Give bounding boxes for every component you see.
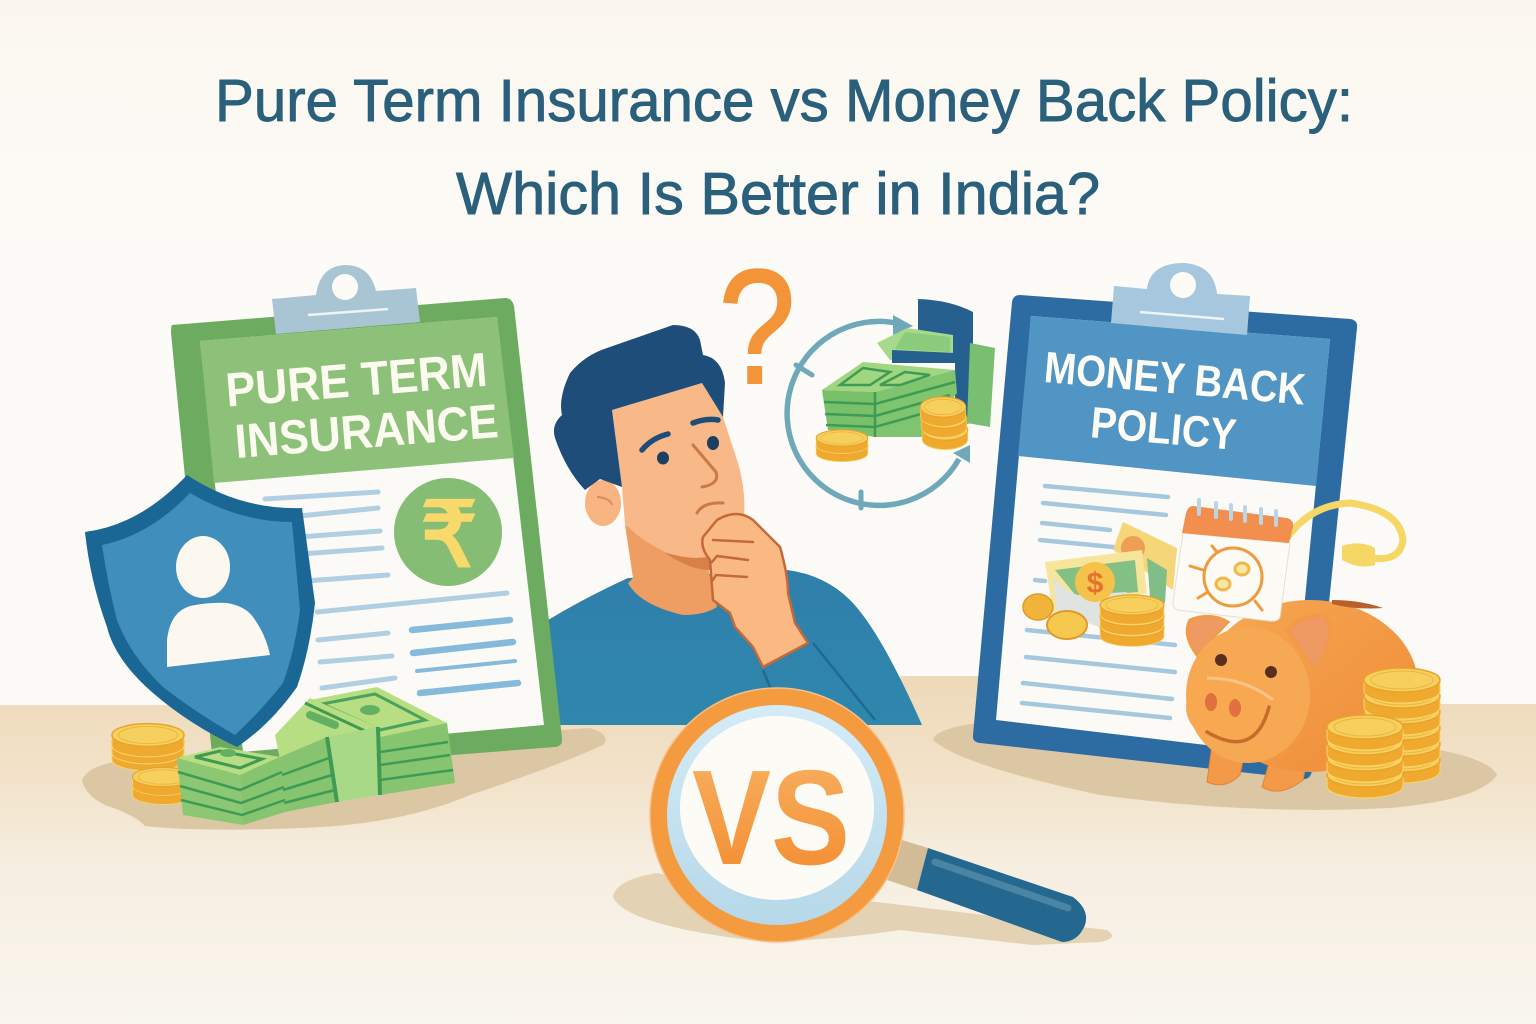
lens: [667, 705, 887, 925]
face: [612, 383, 744, 558]
icon: piggy bank: [1186, 600, 1418, 791]
front stack: [177, 747, 280, 775]
paper sheet: [996, 316, 1330, 755]
sleeve lines: [763, 643, 875, 720]
icon: calendar: [1173, 500, 1293, 621]
shirt: [540, 570, 922, 725]
coins: [922, 420, 968, 450]
person thinking: [540, 325, 922, 725]
document lines: [265, 492, 507, 688]
middle stack: [275, 698, 377, 760]
green header band: [200, 317, 514, 483]
neck: [625, 525, 717, 615]
clip: [272, 265, 420, 334]
fingers: [712, 540, 753, 580]
icon: shield with person: [85, 475, 315, 747]
snout: [1186, 672, 1268, 742]
paper band: [327, 727, 380, 802]
VS label: VS: [692, 742, 850, 893]
icon: cash stacks left: [177, 687, 455, 825]
ground shadows: [82, 722, 1497, 945]
ear: [585, 480, 621, 526]
icon: coins on policy: [1023, 594, 1164, 646]
ear left: [1187, 616, 1228, 655]
back stack: [310, 687, 447, 737]
ferrule: [887, 840, 928, 890]
header text: INSURANCE: [233, 395, 500, 469]
person body: [167, 603, 270, 667]
header text: MONEY BACK: [1042, 343, 1308, 415]
table surface: [0, 676, 1536, 1024]
clipboard board: [171, 298, 562, 773]
rupee badge: ₹: [420, 483, 478, 588]
jaw shadow: [665, 553, 710, 570]
header text: PURE TERM: [224, 344, 489, 418]
rupee badge: [394, 478, 502, 588]
nose and mouth: [693, 445, 723, 513]
blue header band: [1018, 316, 1330, 486]
hair: [554, 325, 725, 490]
hand on chin: [702, 514, 808, 667]
paper sheet: [200, 317, 544, 752]
ear right: [1287, 615, 1331, 670]
eyes: [1215, 654, 1227, 666]
cycle arrows: [787, 321, 959, 505]
title: [215, 68, 1353, 227]
panel: pure term insurance clipboard: [171, 265, 562, 773]
title: Pure Term Insurance vs Money Back Policy:: [215, 68, 1353, 134]
upper cash: [877, 328, 953, 360]
icon: coin stacks right: [1327, 668, 1440, 798]
body: [1202, 600, 1418, 772]
header text: [224, 343, 500, 469]
legs: [1207, 745, 1308, 791]
clip: [1111, 263, 1250, 335]
icon: envelope with cash: [1045, 522, 1177, 627]
icon: money cycle: [787, 299, 995, 508]
icon: envelope with cash: $: [1087, 567, 1104, 600]
document lines: [1022, 486, 1175, 718]
eyes: [657, 436, 719, 464]
green wallet side: [967, 343, 995, 427]
clipboard board: [973, 295, 1357, 779]
panel: money back policy clipboard: [973, 263, 1357, 779]
icon: gold coins left: [112, 724, 193, 804]
slot: [1332, 600, 1383, 608]
wallet back: [918, 299, 973, 425]
icon: magnifying glass with VS: [650, 688, 1086, 942]
handle: [917, 848, 1086, 942]
main cash stack: [822, 362, 955, 392]
person head: [176, 536, 230, 598]
icon: yellow ribbon: [1287, 503, 1403, 567]
title: Which Is Better in India?: [456, 161, 1100, 227]
icon: question mark: ?: [718, 236, 796, 419]
header text: POLICY: [1089, 398, 1238, 460]
rim: [650, 688, 904, 942]
eyebrows: [642, 419, 718, 450]
header text: [1038, 343, 1308, 465]
head: [1186, 627, 1310, 763]
